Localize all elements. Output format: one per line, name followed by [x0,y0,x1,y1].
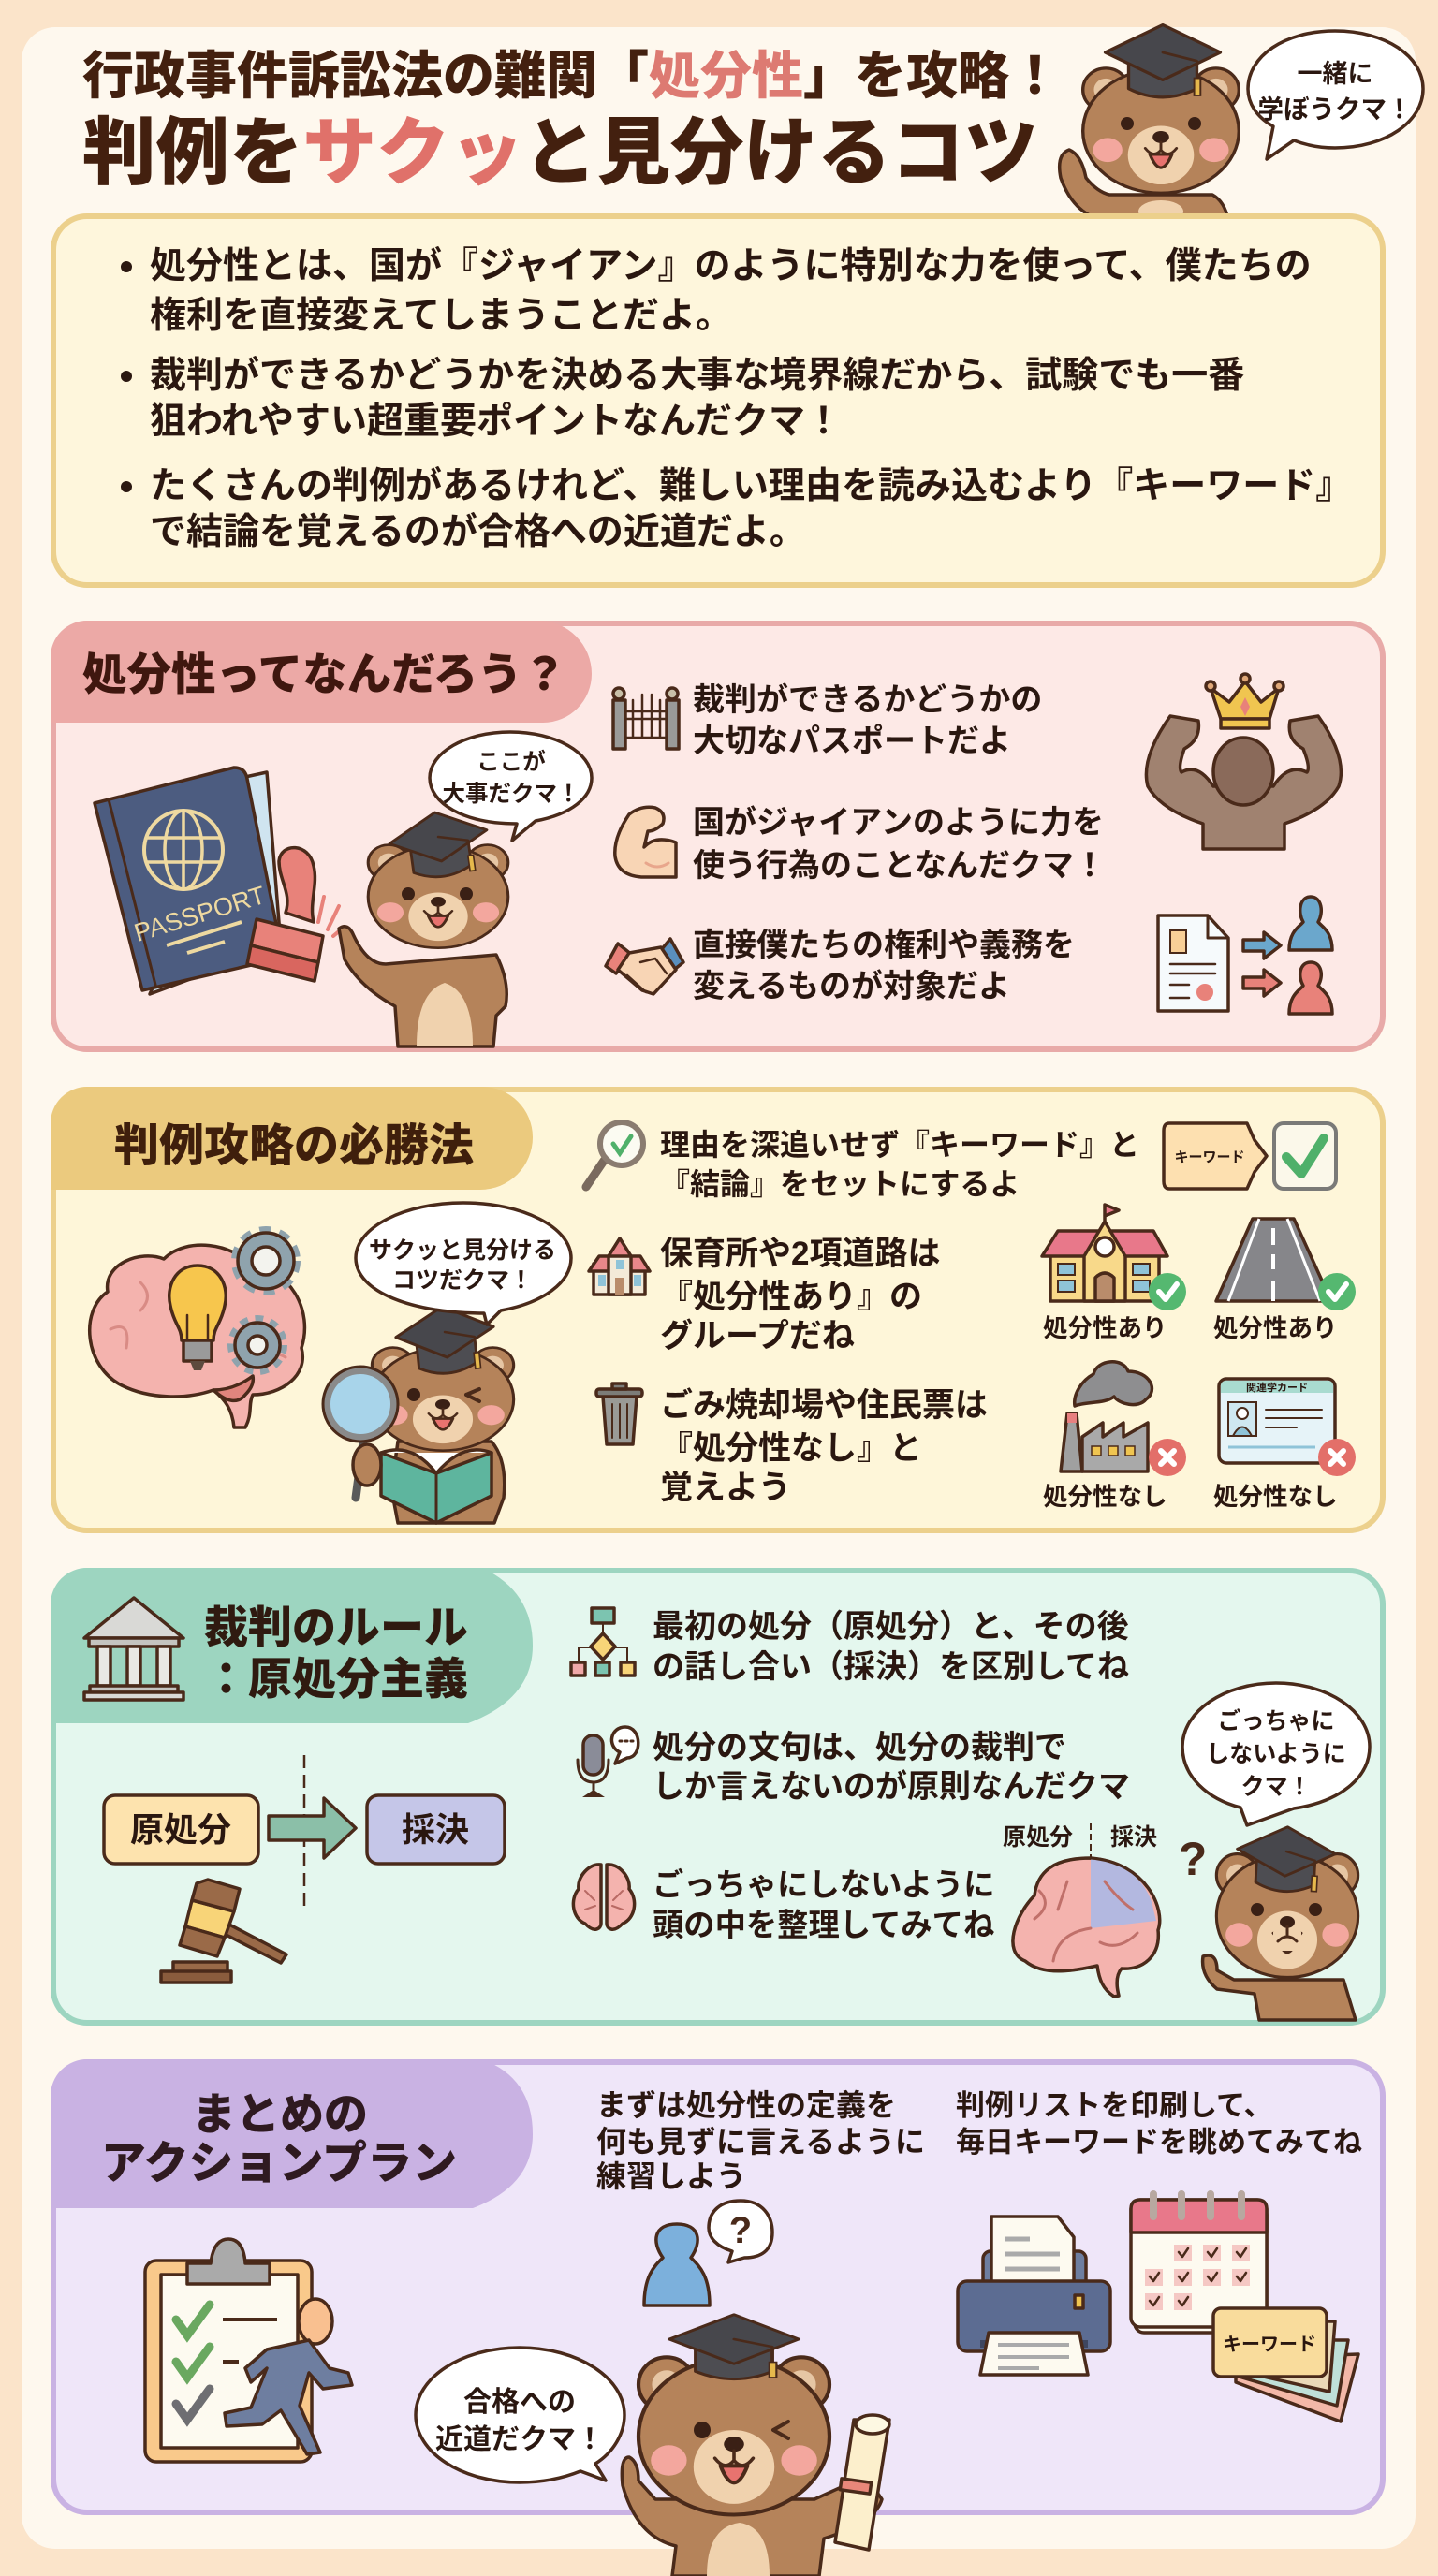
title: 行政事件訴訟法の難関「処分性」を攻略！ [82,47,1061,105]
item: keyword text: 理由を深追いせず『キーワード』と [660,1128,1139,1162]
icon: flowchart [571,1608,635,1676]
item: distinction text: の話し合い（採決）を区別してね [653,1649,1129,1685]
icon: printer [958,2217,1110,2375]
bullet list: 処分性とは、国が『ジャイアン』のように特別な力を使って、僕たちの [150,246,1312,286]
icon: road with check [1216,1219,1356,1310]
icon: handshake [606,939,683,994]
bear: magnifier and book [323,1301,514,1523]
icon: gate [613,688,679,749]
item: print text: 毎日キーワードを眺めてみてね [956,2126,1362,2159]
heading: アクションプラン [101,2139,457,2188]
speech bubble: koko [430,732,592,841]
item: keyword text [660,1128,1139,1201]
bear: graduate with diploma [622,2315,889,2576]
item: yes group text [660,1236,940,1354]
panel: what is shobunsei [51,621,1383,1049]
heading [51,621,592,723]
label: no: 処分性なし [1043,1483,1167,1511]
diagram: gensyobun to saiketsu: 採決 [402,1810,469,1849]
bullet list: 裁判ができるかどうかを決める大事な境界線だから、試験でも一番 [150,356,1244,396]
item: print text [956,2089,1362,2159]
item: yes group text: 『処分性あり』の [660,1279,922,1315]
bear: confused [1203,1824,1358,2020]
speech bubble: top: 一緒に [1298,60,1372,88]
bullet list [121,246,1352,552]
item: definition text: 練習しよう [596,2159,746,2193]
icon: trash can [596,1383,642,1444]
item: passport text: 裁判ができるかどうかの [693,681,1042,718]
speech bubble: top: 学ぼうクマ！ [1258,95,1412,124]
item: definition text [596,2088,925,2193]
icon: running figure [225,2299,352,2454]
speech bubble: goukaku [416,2348,624,2482]
item: yes group text: グループだね [660,1318,855,1354]
icon: flexed arm [615,807,676,877]
bullet list: たくさんの判例があるけれど、難しい理由を読み込むより『キーワード』 [150,466,1352,506]
speech bubble: sakutto: サクッと見分ける [369,1237,556,1264]
heading: ：原処分主義 [204,1654,468,1704]
icon: factory with cross [1061,1362,1186,1476]
heading: 判例攻略の必勝法 [114,1121,474,1171]
icon: question mark: ? [1179,1833,1207,1885]
icon: passport [95,768,281,994]
diagram: gensyobun to saiketsu [104,1755,505,1908]
icon: id card with cross: 関連学カード [1246,1381,1308,1394]
speech bubble: gocchani: しないように [1206,1741,1346,1767]
icon: small brain [573,1865,635,1929]
item: print text: 判例リストを印刷して、 [956,2089,1273,2122]
item: no group text [660,1387,988,1506]
item: distinction text [653,1609,1129,1685]
item: distinction text: 最初の処分（原処分）と、その後 [653,1609,1129,1645]
speech bubble: top [1248,31,1423,159]
item: organize text: ごっちゃにしないように [653,1868,995,1903]
panel: action plan [51,2059,1383,2576]
item: yes group text: 保育所や2項道路は [660,1236,940,1272]
icon: courthouse [84,1598,183,1700]
icon: crown [1206,674,1284,728]
icon: brain with bulb [90,1245,304,1427]
item: jaian text: 国がジャイアンのように力を [693,804,1104,841]
icon: small school [589,1238,650,1295]
icon: person with question: ? [729,2210,752,2251]
icon: school with check [1042,1205,1186,1310]
item: jaian text [693,804,1106,884]
label: no: 処分性なし [1213,1483,1337,1511]
item: no group text: 『処分性なし』と [660,1430,922,1467]
icon: diploma [835,2415,889,2550]
item: definition text: 何も見ずに言えるように [596,2125,925,2159]
icon: stamp [247,848,345,981]
item: rights text: 変えるものが対象だよ [693,968,1010,1004]
icon: document to people [1158,897,1332,1014]
icon: microphone [578,1727,638,1797]
bullet list: で結論を覚えるのが合格への近道だよ。 [150,512,806,552]
speech bubble: sakutto [356,1203,571,1325]
heading [51,1568,533,1723]
title: 判例をサクッと見分けるコツ [82,111,1038,194]
label: yes: 処分性あり [1213,1314,1337,1342]
bullet list: 狙われやすい超重要ポイントなんだクマ！ [150,402,842,442]
icon: keyword cards: キーワード [1223,2334,1316,2355]
heading: 処分性ってなんだろう？ [82,651,566,700]
speech bubble: koko: ここが [477,748,546,775]
item: no group text: 覚えよう [660,1470,791,1506]
bear mascot: top [1060,25,1239,223]
icon: gavel [161,1880,286,1983]
label: original disposition and decision [1003,1823,1157,1914]
icon: clipboard [145,2239,312,2462]
heading [51,2059,533,2208]
item: keyword text: 『結論』をセットにするよ [660,1167,1020,1201]
heading [51,1087,533,1190]
icon: keyword tag and check [1164,1123,1336,1189]
speech bubble: gocchani: ごっちゃに [1217,1707,1335,1734]
item: jaian text: 使う行為のことなんだクマ！ [693,848,1106,884]
icon: id card with cross [1219,1379,1356,1476]
icon: large brain [1013,1858,1160,1997]
heading: 裁判のルール [204,1603,468,1652]
item: no group text: ごみ焼却場や住民票は [660,1387,988,1424]
item: organize text [653,1868,995,1943]
item: rights text [693,928,1075,1004]
item: objection text [653,1730,1130,1805]
label: original disposition and decision: 原処分 [1003,1824,1073,1851]
item: organize text: 頭の中を整理してみてね [653,1909,994,1943]
icon: keyword tag and check: キーワード [1174,1149,1245,1165]
speech bubble: goukaku: 合格への [463,2387,576,2418]
panel: original disposition rule [51,1568,1383,2023]
speech bubble: koko: 大事だクマ！ [442,781,580,807]
title [82,47,1061,194]
item: objection text: しか言えないのが原則なんだクマ [653,1768,1130,1805]
icon: magnifier check [586,1122,643,1187]
item: passport text [693,681,1042,759]
item: rights text: 直接僕たちの権利や義務を [693,928,1075,963]
icon: person with question [644,2201,772,2305]
item: passport text: 大切なパスポートだよ [693,724,1011,759]
speech bubble: gocchani [1182,1683,1370,1825]
item: objection text: 処分の文句は、処分の裁判で [653,1730,1066,1765]
heading: まとめの [192,2089,368,2139]
speech bubble: goukaku: 近道だクマ！ [435,2424,604,2455]
panel: introduction [53,216,1383,585]
icon: calendar [1131,2194,1267,2333]
speech bubble: gocchani: クマ！ [1240,1774,1312,1800]
icon: passport: PASSPORT [131,881,269,947]
diagram: gensyobun to saiketsu: 原処分 [130,1810,231,1849]
icon: gears [233,1233,294,1369]
item: definition text: まずは処分性の定義を [596,2088,896,2122]
icon: strong figure [1146,674,1341,849]
speech bubble: sakutto: コツだクマ！ [392,1267,533,1294]
panel: winning method [51,1087,1383,1530]
bullet list: 権利を直接変えてしまうことだよ。 [150,296,732,336]
icon: keyword cards [1213,2308,1358,2422]
label: original disposition and decision: 採決 [1110,1824,1157,1851]
label: yes: 処分性あり [1043,1314,1167,1342]
bear: pointing [339,806,508,1046]
